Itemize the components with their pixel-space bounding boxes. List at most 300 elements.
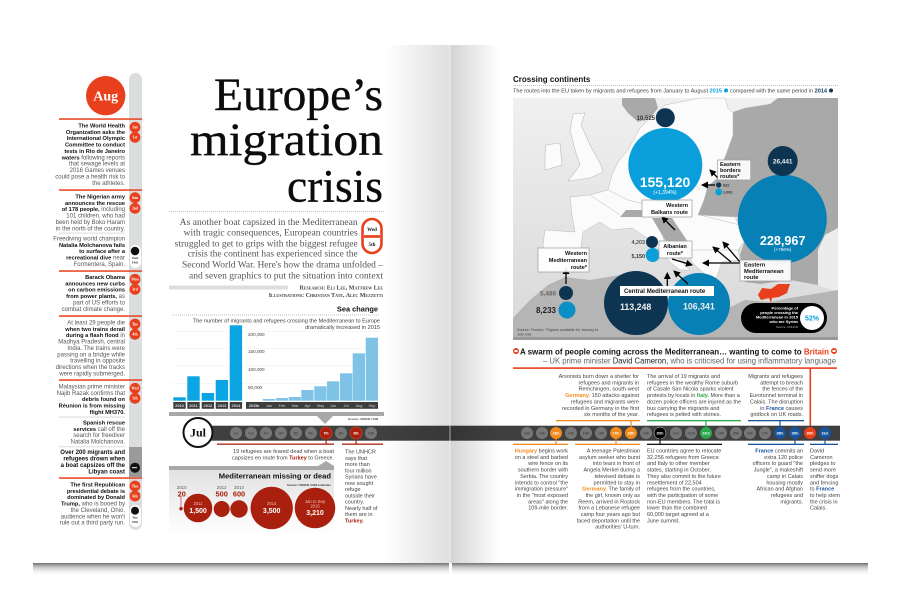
callout: Albanian route xyxy=(659,241,692,258)
event: David Cameron pledge: to France xyxy=(810,487,834,493)
icon: Syria shape xyxy=(758,284,790,303)
text: Olympic water quality: Organization asks the xyxy=(66,130,125,136)
year labels: 2010 xyxy=(175,403,184,408)
text: Olympic water quality: International Olympic xyxy=(67,136,125,142)
text: Spanish rescue services: services call off the xyxy=(73,427,125,433)
event: France extra police: migrants. xyxy=(780,499,803,505)
date dots, left page: 4th xyxy=(279,431,283,435)
date badges: Sat xyxy=(132,126,138,130)
text: Barack Obama: from power plants, as xyxy=(66,294,125,300)
Western Mediterranean route circles xyxy=(536,286,576,318)
intro text: As another boat capsized in the Mediterranean xyxy=(180,217,358,227)
sidebar red rules xyxy=(59,118,142,479)
source note: July only xyxy=(517,332,532,336)
event: Germany shelter arson: Arsonists burn down a shelter for xyxy=(559,374,639,380)
event: Germany shelter arson: refugees and migrants were xyxy=(571,399,639,405)
panel: sea change chart: dramatically increased in 2015 xyxy=(305,325,380,331)
text: train derailment: when two trains derail xyxy=(64,327,125,333)
year labels: 2014 xyxy=(232,403,241,408)
panel: sea change chart: Sea change xyxy=(337,305,378,314)
callout: Western Mediterranean route xyxy=(538,248,589,272)
intro text: struggled to get to grips with the biggest refugee xyxy=(175,238,358,248)
event: EU relocation agreement: EU countries agree to relocate xyxy=(647,448,721,454)
callout: refugees feared dead: capsizes en route from Turkey to Greece. xyxy=(232,456,334,462)
text: Nigerian army: The Nigerian army xyxy=(75,194,126,200)
bubble chart: 2010 xyxy=(177,485,187,490)
callout: Western Mediterranean route: Western xyxy=(565,251,588,257)
axis labels: 200,000 xyxy=(248,332,265,337)
date dots, right page: 18th xyxy=(628,431,634,435)
event: Germany shelter arson: refugees and migrants in xyxy=(578,380,639,386)
year labels: Jun xyxy=(330,403,336,408)
event: Palestinian teenager Reem: authorities' U-turn. xyxy=(595,525,640,531)
Eastern borders route circles: 10,525 xyxy=(637,116,656,122)
text: MH370 debris: Réunion is from missing xyxy=(59,404,126,410)
event: Germany shelter arson: Remchingen, south-west xyxy=(578,387,639,393)
date dots, right page: 13th xyxy=(553,431,559,435)
date dots, right page: 21st xyxy=(673,431,679,435)
callout: Syrian share pill: Source: UNHCR xyxy=(776,325,799,329)
text: Libyan coast capsize: Over 200 migrants and xyxy=(60,450,125,456)
bubble chart xyxy=(177,485,335,529)
date dots, right page: 28th xyxy=(777,431,783,435)
year labels: 2011 xyxy=(189,403,199,408)
Eastern borders route circles: 155,120 xyxy=(640,174,691,190)
intro text: with tragic consequences, European countries xyxy=(184,228,358,238)
text: MH370 debris: debris found on xyxy=(82,397,126,403)
event: David Cameron pledge: David xyxy=(810,448,824,454)
magazine gutter shading xyxy=(385,45,500,563)
Eastern borders route circles: 1,002 xyxy=(723,190,733,194)
event: Italy Casale San Nicola: refugees in the wealthy Rome suburb xyxy=(647,380,738,386)
text: Nigerian army: announces the rescue xyxy=(65,201,125,207)
date dots, right page: 11th xyxy=(524,431,530,435)
event: Italy Casale San Nicola: refugees is pelted with stones. xyxy=(647,412,721,418)
text: Barack Obama: part of US efforts to xyxy=(73,300,126,306)
date dots, right page: 22nd xyxy=(687,431,695,435)
year labels: 2013 xyxy=(218,403,227,408)
text: Olympic water quality: could pose a health risk to xyxy=(55,174,126,180)
date dots, right page: 27th xyxy=(762,431,768,435)
year labels: May xyxy=(317,403,324,408)
date dots, right page: 17th xyxy=(613,431,619,435)
Western Mediterranean route circles: 5,486 xyxy=(540,290,556,297)
event: France extra police: France commits an xyxy=(755,448,803,454)
year labels: Apr xyxy=(304,403,311,408)
year labels xyxy=(173,402,378,409)
text: Olympic water quality: tests in Rio de Janeiro xyxy=(64,149,126,155)
date dots, right page: 30th xyxy=(807,431,813,435)
date badges: Wed xyxy=(131,387,140,391)
event: France extra police: housing mostly xyxy=(766,480,803,486)
icon: black event markers: 25th xyxy=(132,520,138,524)
title: migration xyxy=(190,114,383,166)
text: Republican debate: the Cleveland, Ohio, xyxy=(71,508,125,514)
icon: black event markers: Tue xyxy=(132,516,138,520)
event: Hungary border fence: Serbia. The country xyxy=(520,474,568,480)
event: Palestinian teenager Reem: permitted to stay in xyxy=(594,480,640,486)
event: David Cameron pledge: send more xyxy=(810,468,836,474)
date badges: 1st xyxy=(133,136,138,140)
event: EU relocation agreement: They also commit to the future xyxy=(647,474,721,480)
callout: Eastern Mediterranean route: Mediterranean xyxy=(744,269,784,275)
year labels: Sep xyxy=(369,403,375,408)
event: Hungary border fence: southern border with xyxy=(518,468,568,474)
icon: Wed 5th badge xyxy=(362,219,382,253)
date dots, right page: 29th xyxy=(792,431,798,435)
event: David Cameron pledge: sniffer dogs xyxy=(810,474,839,480)
event: Palestinian teenager Reem: faced deportation until the xyxy=(577,518,640,524)
event: Hungary border fence: immigration pressure" xyxy=(515,487,568,493)
callout: Western Balkans route: Balkans route xyxy=(651,210,688,216)
callout: Eastern borders routes: routes* xyxy=(720,174,740,180)
callout: Syrian share pill: 52% xyxy=(805,316,820,322)
text: Olympic water quality: that sewage levels at xyxy=(69,162,125,168)
intro text: and seven graphics to put the situation into context xyxy=(189,270,384,280)
event: Hungary border fence xyxy=(513,438,568,512)
event: David Cameron pledge: the crisis in xyxy=(810,499,838,505)
icon: black event markers: 19th xyxy=(132,260,138,264)
text: Republican debate: Trump, who is booed by xyxy=(61,502,125,508)
text: Natalia Molchanova: to surface after a xyxy=(79,249,126,255)
panel: crossing continents map xyxy=(513,75,838,340)
event: Hungary border fence: wire fence on its xyxy=(527,461,568,467)
event: Palestinian teenager Reem: Angela Merkel during a xyxy=(583,468,641,474)
credits xyxy=(169,286,383,299)
heading: Mediterranean missing or dead xyxy=(219,471,331,480)
event: Hungary border fence: intends to control "the xyxy=(515,480,568,486)
bubble chart: 1,500 xyxy=(189,508,207,515)
axis labels: 100,000 xyxy=(248,367,265,372)
callout: refugees feared dead xyxy=(217,438,334,462)
icon: Jul month badge: Jul xyxy=(190,426,207,440)
date dots, right page: 24th xyxy=(718,431,724,435)
Central Mediterranean route circles xyxy=(604,271,730,335)
quote heading: – UK prime minister David Cameron, who is criticised for using inflammatory language xyxy=(543,357,836,366)
callout: Albanian route: Albanian xyxy=(663,244,687,250)
Albanian route circles xyxy=(632,236,660,262)
Eastern Mediterranean route circles: (+766%) xyxy=(774,247,792,252)
callout: Syrian share pill: who are Syrian xyxy=(769,319,799,324)
date badges: Sun xyxy=(132,196,139,200)
event: Germany shelter arson: Germany. 150 attacks against xyxy=(565,393,639,399)
source note: Source: Frontex. *Figures available for January to xyxy=(517,328,598,332)
text: Republican debate: audience when he won't xyxy=(61,514,125,520)
year labels: Aug xyxy=(356,403,362,408)
text: train derailment: India. The trains were xyxy=(67,346,126,352)
text: Barack Obama: combat climate change. xyxy=(62,307,125,313)
event: Eurotunnel Calais: in France causes xyxy=(760,406,803,412)
callout: Syrian share pill: people crossing the xyxy=(760,310,799,315)
callout: UNHCR four million Syrians: country. xyxy=(345,500,365,506)
bubble chart: Jan to Sep xyxy=(305,499,326,504)
event: France extra police: African and Afghan xyxy=(757,487,803,493)
event: France extra police: refugees and xyxy=(771,493,803,499)
event: Italy Casale San Nicola: of Casale San Nicola sparks violent xyxy=(647,387,734,393)
callout: Western Balkans route: Western xyxy=(666,203,689,209)
event: Italy Casale San Nicola: dozen police officers are injured as the xyxy=(647,399,741,405)
callout: UNHCR four million Syrians: more than xyxy=(345,462,370,468)
bubble chart: 2011 xyxy=(193,501,203,506)
event: Palestinian teenager Reem: Germany. The family of xyxy=(582,487,640,493)
event: Italy Casale San Nicola: The arrival of 19 migrants and xyxy=(647,374,720,380)
title xyxy=(190,69,383,213)
date dots, right page: 26th xyxy=(747,431,753,435)
text: train derailment: travelling in opposite xyxy=(70,359,126,365)
bar chart: yearly 2010-2014 xyxy=(173,325,242,401)
Eastern borders route circles: (+1,394%) xyxy=(653,190,677,196)
event: EU relocation agreement: 60,000 target agreed at a xyxy=(647,512,710,518)
event: EU relocation agreement: lower than the combined xyxy=(647,506,707,512)
callout: UNHCR four million Syrians: now sought xyxy=(345,481,374,487)
event: Palestinian teenager Reem: into tears in front of xyxy=(593,461,640,467)
intro text: crisis the continent has experienced since the xyxy=(188,249,358,259)
year labels: 2012 xyxy=(204,403,213,408)
date dots, right page: 12th xyxy=(539,431,545,435)
callout: Eastern borders routes: Eastern xyxy=(720,162,741,168)
credits: Illustrations: Christian Tate, Alec Mezzetti xyxy=(269,293,383,299)
year labels: Jan xyxy=(266,403,272,408)
callout: Albanian route: route* xyxy=(667,251,684,257)
text: Spanish rescue services: Spanish rescue xyxy=(83,420,125,426)
date dots, right page: 31st xyxy=(822,431,829,435)
date dots, right page: 23rd xyxy=(702,431,710,435)
callout: UNHCR four million Syrians: refuge xyxy=(345,487,361,493)
heading: Crossing continents xyxy=(513,75,591,84)
callout: Central Mediterranean route xyxy=(620,286,714,296)
date dots, left page: 1st xyxy=(234,431,238,435)
event: EU relocation agreement: and Italy to other member xyxy=(647,461,710,467)
Central Mediterranean route circles: 113,248 xyxy=(620,302,651,312)
year labels: Feb xyxy=(279,403,285,408)
event: France extra police xyxy=(748,438,804,505)
date badges: 5th xyxy=(132,397,139,401)
event: Germany shelter arson: six months of the year. xyxy=(584,412,639,418)
event: David Cameron pledge xyxy=(810,438,840,512)
event: David Cameron pledge: Cameron xyxy=(810,455,833,461)
text: train derailment: passing on a bridge while xyxy=(57,352,126,358)
timeline band xyxy=(184,418,840,447)
bubble chart: 3,500 xyxy=(263,508,281,515)
icon: Wed 5th badge: Wed xyxy=(367,228,377,233)
event: Palestinian teenager Reem: televised debate is xyxy=(594,474,640,480)
route arrows xyxy=(566,170,740,288)
panel: sea change chart xyxy=(169,305,384,424)
text: train derailment: At least 29 people die xyxy=(67,320,126,326)
event: EU relocation agreement: resettlement of 22,504 xyxy=(647,480,702,486)
callout: Eastern Mediterranean route: Eastern xyxy=(744,262,766,268)
callout: UNHCR four million Syrians xyxy=(342,438,383,524)
event: France extra police: officers to guard "the xyxy=(753,461,803,467)
text: Nigerian army: 101 children, who had xyxy=(66,214,125,220)
text: Barack Obama: announces new curbs xyxy=(65,281,125,287)
panel: sea change chart: Source: UNHCR / IOM xyxy=(348,417,379,421)
callout: refugees feared dead: 19 refugees are feared dead when a boat xyxy=(233,449,334,455)
event: Eurotunnel Calais: attempt to breach xyxy=(760,380,803,386)
event: Eurotunnel Calais: Migrants and refugees xyxy=(748,374,803,380)
Central Mediterranean route circles: 106,341 xyxy=(683,302,715,312)
title: Europe’s xyxy=(214,69,383,121)
year labels: Mar xyxy=(292,403,299,408)
subheading with legend: The routes into the EU taken by migrants and refugees from January to August 2015 xyxy=(513,88,723,94)
date badges: 3rd xyxy=(132,288,139,292)
icon: black event markers: Wed xyxy=(132,256,138,260)
date dots, right page: 25th xyxy=(733,431,739,435)
text: train derailment: directions when the tracks xyxy=(56,365,125,371)
icon: Aug month badge: Aug xyxy=(93,90,118,104)
bar chart: monthly 2015 xyxy=(263,338,378,401)
text: Olympic water quality: The World Health xyxy=(78,124,126,130)
axis labels: 50,000 xyxy=(248,385,262,390)
date badges: Mon xyxy=(131,278,140,282)
date dots, left page: 2nd xyxy=(248,431,254,435)
date badges: 4th xyxy=(132,333,139,337)
text: Natalia Molchanova: Freediving world champion xyxy=(53,236,125,242)
event: Palestinian teenager Reem: the girl, known only as xyxy=(586,493,640,499)
Eastern borders route circles: 632 xyxy=(723,184,729,188)
bubble chart: 20 xyxy=(178,490,186,498)
event: Italy Casale San Nicola xyxy=(647,374,741,428)
event: EU relocation agreement: non-EU members. The total is xyxy=(647,499,720,505)
event: France extra police: extra 120 police xyxy=(764,455,803,461)
event: Palestinian teenager Reem: from a Lebanese refugee xyxy=(579,506,640,512)
magazine page shadow xyxy=(33,563,868,576)
text: Natalia Molchanova: recreational dive near xyxy=(66,256,125,262)
text: Natalia Molchanova: Formentera, Spain. xyxy=(74,262,125,268)
text: Republican debate: The first Republican xyxy=(70,482,126,488)
text: Republican debate: presidential debate is xyxy=(67,489,125,495)
event: Hungary border fence: in the "most exposed xyxy=(517,493,568,499)
text: Natalia Molchanova: Natalia Molchanova fails xyxy=(59,243,125,249)
text: Barack Obama: on carbon emissions xyxy=(68,288,125,294)
Eastern borders route circles xyxy=(628,108,733,202)
date badges: 2nd xyxy=(132,207,139,211)
callout: Western Mediterranean route: Mediterranean xyxy=(549,258,588,264)
event: David Cameron pledge: Calais. xyxy=(810,506,827,512)
event: David Cameron pledge: to help stem xyxy=(810,493,840,499)
bubble chart: 600 xyxy=(233,490,245,498)
Albanian route circles: 5,150 xyxy=(632,254,645,260)
bubble chart: 2012 xyxy=(217,485,227,490)
date dots, right page: 16th xyxy=(598,431,604,435)
text: Republican debate: dominated by Donald xyxy=(67,495,126,501)
event: Germany shelter arson: recorded in Germany in the first xyxy=(562,406,639,412)
date badges: 6th xyxy=(132,494,139,498)
callout: Syrian share pill: Percentage of xyxy=(772,306,799,310)
intro text xyxy=(175,217,384,280)
bubble chart: 500 xyxy=(216,490,228,498)
panel: sea change chart: The number of migrants and refugees crossing the Mediterranean to Europe xyxy=(193,319,380,325)
text: Nigerian army: of 178 people, including xyxy=(62,207,125,213)
event: Eurotunnel Calais: Eurotunnel terminal in xyxy=(749,393,803,399)
event: EU relocation agreement: states, starting in October. xyxy=(647,468,711,474)
text: Libyan coast capsize: Libyan coast xyxy=(88,470,125,476)
icon: Jul month badge xyxy=(184,418,212,447)
callout: Western Mediterranean route: route* xyxy=(571,265,588,271)
credits: Research: Eli Lee, Matthew Lee xyxy=(300,286,383,292)
event: Eurotunnel Calais: gridlock on UK roads. xyxy=(750,412,803,418)
date dots, right page: 14th xyxy=(568,431,574,435)
panel: August timeline sidebar xyxy=(53,73,142,530)
Albanian route circles: 4,203 xyxy=(632,240,645,246)
text: Barack Obama: Barack Obama xyxy=(85,275,126,281)
year labels: 2015▸ xyxy=(249,403,260,408)
event: EU relocation agreement: refugees from the countries, xyxy=(647,487,716,493)
callout: UNHCR four million Syrians: Turkey. xyxy=(345,518,364,524)
callout: UNHCR four million Syrians: Nearly half of xyxy=(345,506,378,512)
quote heading: A swarm of people coming across the Mediterranean… wanting to come to Britain xyxy=(520,346,829,356)
text: Nigerian army: in the north of the country. xyxy=(56,226,125,232)
text: train derailment: during a flash flood in xyxy=(66,333,125,339)
callout: UNHCR four million Syrians: outside their xyxy=(345,493,375,499)
callout: UNHCR four million Syrians: says that xyxy=(345,456,367,462)
intro text: Second World War. Here's how the drama unfolded – xyxy=(182,259,384,269)
date dots, left page: 6th xyxy=(309,431,313,435)
date dots, left page: 5th xyxy=(294,431,298,435)
date dots, right page xyxy=(521,427,831,439)
event: EU relocation agreement: June summit. xyxy=(647,518,680,524)
callout: UNHCR four million Syrians: Syrians have xyxy=(345,474,377,480)
Western Mediterranean route circles: 8,233 xyxy=(536,306,557,315)
callout: Eastern borders routes: borders xyxy=(720,168,741,174)
event: Palestinian teenager Reem: asylum seeker who burst xyxy=(579,455,640,461)
Eastern Mediterranean route circles: 228,967 xyxy=(760,234,805,248)
text: Olympic water quality: waters following reports xyxy=(62,155,125,161)
callout: UNHCR four million Syrians: them are in xyxy=(345,512,373,518)
text: Libyan coast capsize: a boat capsizes off the xyxy=(61,463,126,469)
event: Italy Casale San Nicola: protests by locals in Italy. More than a xyxy=(647,393,740,399)
event: France extra police: Jungle", a makeshift xyxy=(754,468,803,474)
bubble chart: 3,210 xyxy=(306,510,324,517)
date dots, left page: 3rd xyxy=(264,431,269,435)
text: MH370 debris: flight MH370. xyxy=(90,410,125,416)
date dots, right page: 20th xyxy=(657,431,663,435)
text: Libyan coast capsize: refugees drown when xyxy=(63,457,125,463)
icon: black event markers xyxy=(130,247,140,524)
text: MH370 debris: Malaysian prime minister xyxy=(59,384,125,390)
callout: Eastern Mediterranean route xyxy=(740,260,791,281)
callout: Central Mediterranean route: Central Mediterranean route xyxy=(624,288,706,295)
panel: Mediterranean missing or dead xyxy=(169,461,335,535)
event: Palestinian teenager Reem: Reem, arrived in Rostock xyxy=(578,499,640,505)
callout: UNHCR four million Syrians: The UNHCR xyxy=(345,450,376,456)
quote heading xyxy=(513,346,837,430)
event: Germany shelter arson xyxy=(556,374,640,428)
date dots, left page: 8th xyxy=(339,431,343,435)
text: Olympic water quality: the athletes. xyxy=(92,181,125,187)
text: Spanish rescue services: search for freediver xyxy=(73,433,125,439)
bubble chart: 2013 xyxy=(234,485,244,490)
Eastern Mediterranean route circles: 26,441 xyxy=(773,158,793,166)
text: Nigerian army: been held by Boko Haram xyxy=(56,220,125,226)
icon: Wed 5th badge: 5th xyxy=(369,243,376,248)
date badges xyxy=(130,122,140,501)
icon: Aug month badge xyxy=(86,76,125,115)
callout: Syrian share pill: Mediterranean in 2015 xyxy=(756,314,799,320)
event: Eurotunnel Calais xyxy=(748,374,804,428)
event: EU relocation agreement xyxy=(646,438,722,524)
event: Italy Casale San Nicola: bus carrying the migrants and xyxy=(647,406,719,412)
Eastern Mediterranean route circles xyxy=(738,146,827,264)
text: Olympic water quality: Committee to conduct xyxy=(65,143,125,149)
event: David Cameron pledge: and fencing xyxy=(810,480,838,486)
event: Hungary border fence: areas" along the xyxy=(528,499,568,505)
date dots, left page: 9th xyxy=(353,431,359,435)
axis labels: 150,000 xyxy=(248,349,265,354)
event: EU relocation agreement: with the participation of some xyxy=(646,493,718,499)
map base xyxy=(513,98,838,340)
event: France extra police: camp in Calais xyxy=(767,474,803,480)
